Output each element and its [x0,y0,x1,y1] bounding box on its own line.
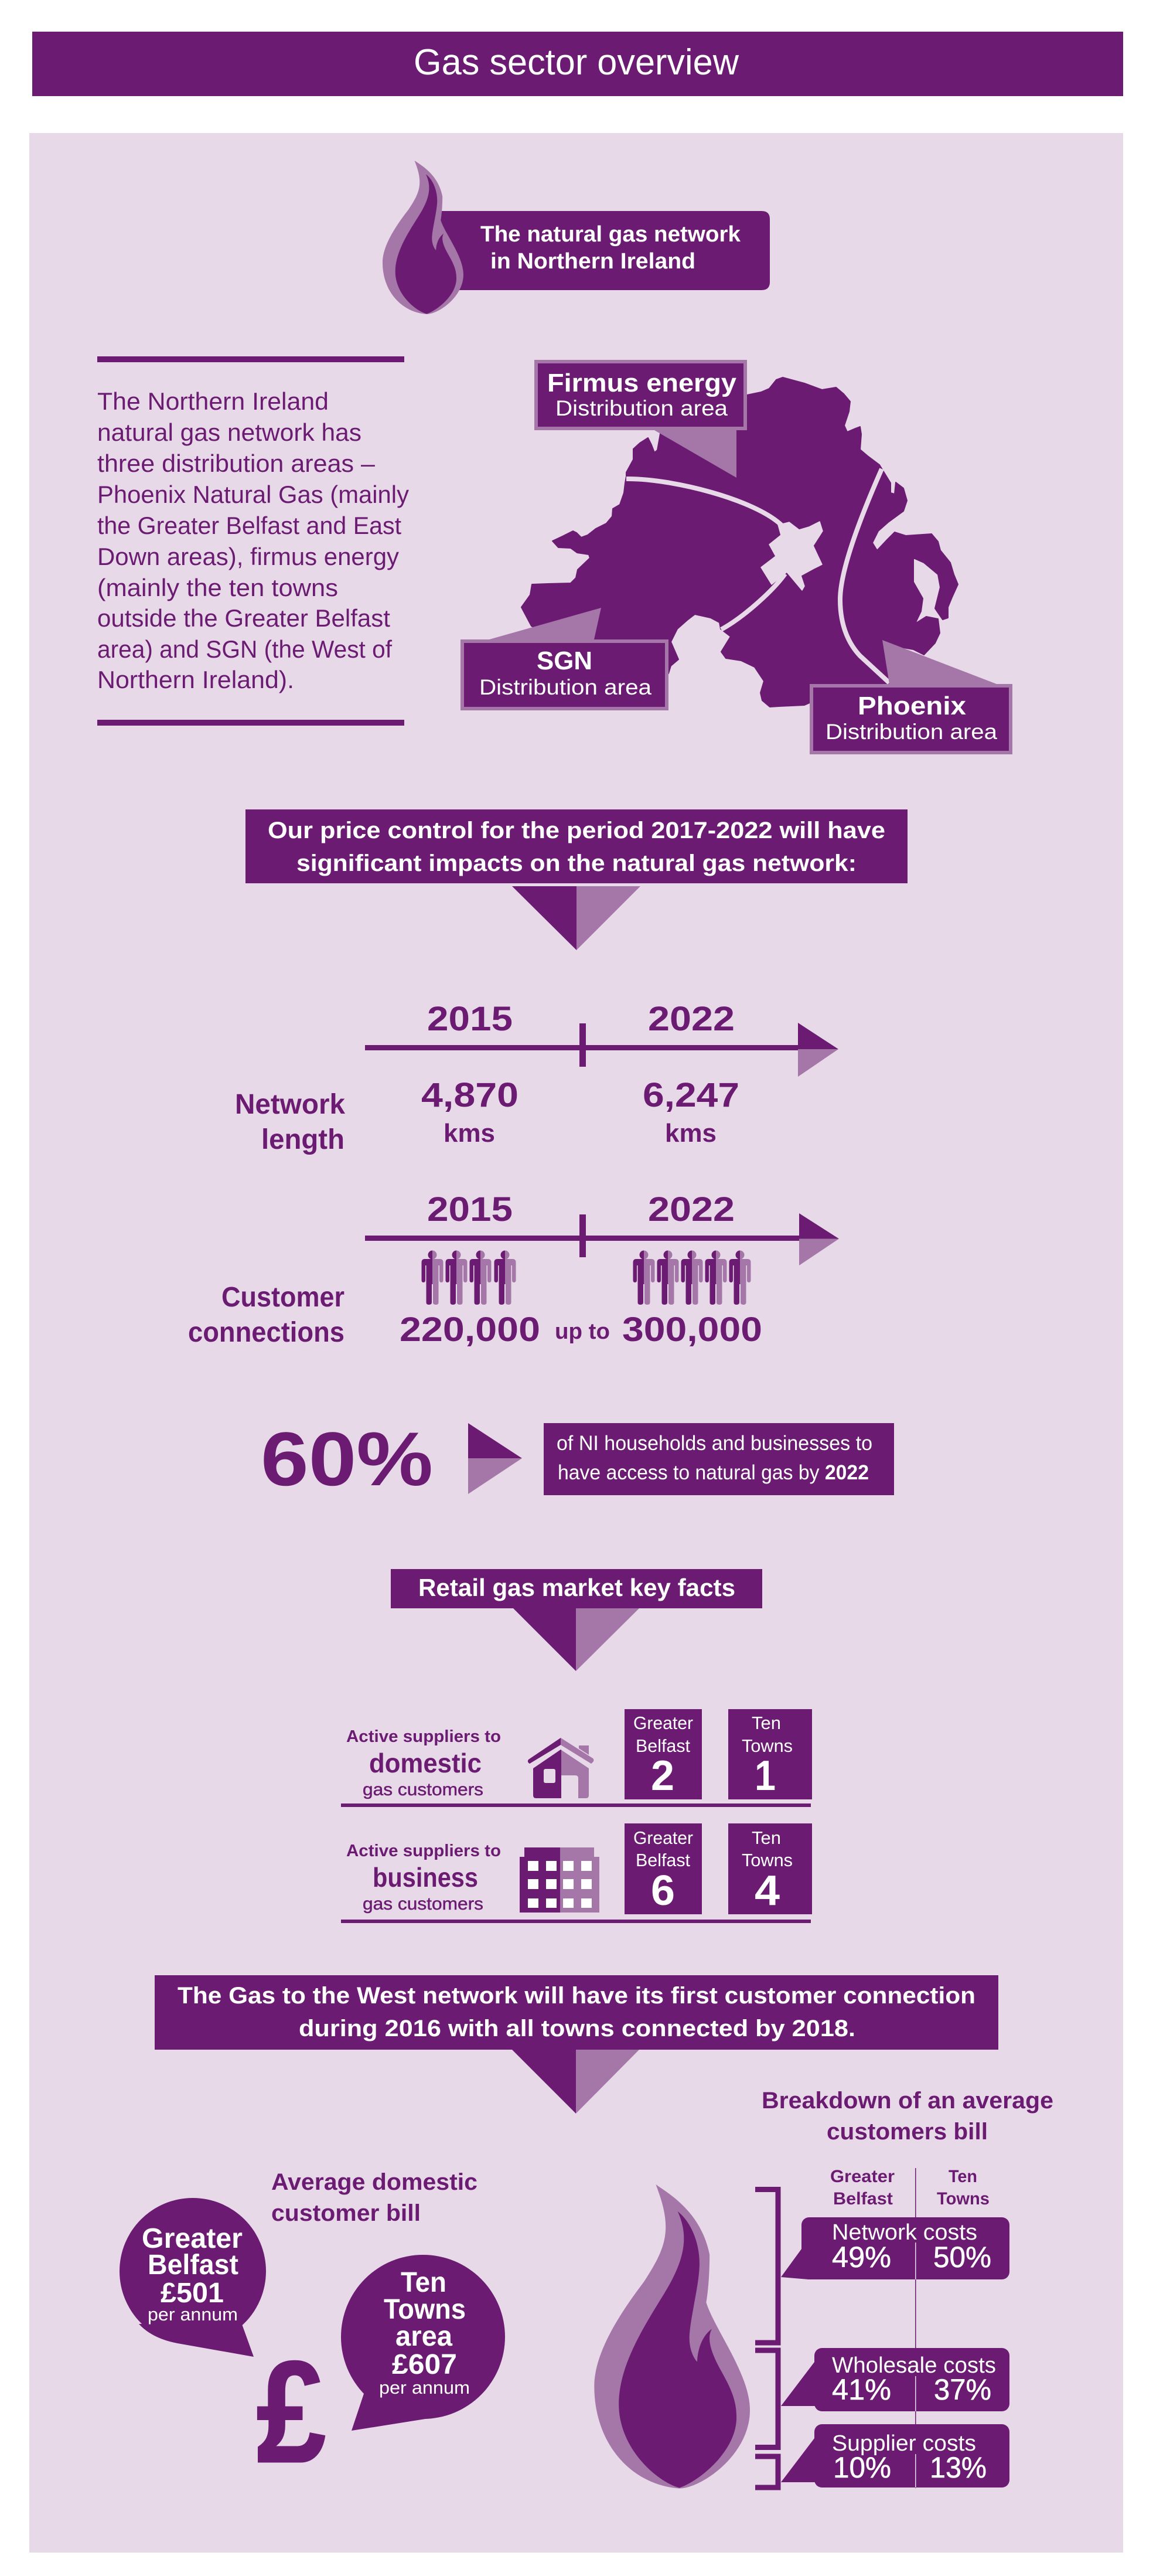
column headers: Greater [830,2167,895,2186]
speech bubble: Ten Towns: Ten [401,2267,446,2298]
icon: pound sign: £ [257,2332,326,2493]
row: business suppliers label [346,1842,501,1914]
speech bubble: Greater Belfast: Belfast [148,2250,238,2281]
callout: Phoenix: Phoenix [858,692,967,720]
icon: house [528,1738,593,1798]
icon: office building [520,1847,599,1913]
map of Northern Ireland [521,377,958,707]
stat: business Ten Towns: Towns [742,1850,793,1870]
speech bubble: Ten Towns [341,2255,505,2431]
heading: natural gas network: in Northern Ireland [490,249,695,274]
callout: SGN: Distribution area [479,675,651,699]
callout: SGN: SGN [537,646,592,675]
heading: natural gas network [436,211,770,290]
timeline: network length: kms [665,1119,717,1148]
brackets [755,2190,778,2487]
timeline: network length [235,1000,838,1155]
stat: domestic Greater Belfast [625,1709,702,1799]
column headers: Ten [949,2167,977,2186]
timeline: customer connections: 2015 [427,1190,513,1229]
cost box: supplier: Supplier costs [832,2431,976,2456]
title bar [32,32,1123,96]
row: business suppliers label: Active suppliers to [346,1842,501,1860]
timeline: customer connections [188,1190,839,1349]
stat: 60 percent: 60% [261,1416,433,1502]
stat: domestic Ten Towns: Towns [742,1736,793,1756]
stat: business Ten Towns: Ten [752,1828,781,1848]
timeline: network length: Network [235,1089,345,1120]
text block: network description: outside the Greater Belfast [97,604,390,632]
stat: business Greater Belfast [625,1823,702,1914]
timeline: network length: length [261,1124,344,1155]
callout: household access: have access to natural gas by 2022 [558,1461,869,1484]
stat: domestic Greater Belfast: Belfast [636,1736,690,1756]
timeline: customer connections: up to [555,1319,610,1344]
timeline: customer connections: Customer [221,1282,344,1313]
cost box: wholesale: 41% [832,2373,891,2406]
arrow: price control [512,886,640,950]
stat: business Greater Belfast: Greater [633,1828,693,1848]
cost box: wholesale: 37% [934,2373,991,2406]
arrow: Gas to the West [512,2050,639,2114]
callout: Firmus energy [536,362,745,478]
timeline: network length: 6,247 [643,1076,739,1114]
speech bubble: Greater Belfast: Greater [142,2223,243,2254]
heading: average domestic bill: Average domestic [271,2169,477,2195]
banner: retail key facts: Retail gas market key facts [418,1574,735,1601]
timeline: network length: 4,870 [421,1076,518,1114]
timeline: network length: 2022 [648,1000,735,1038]
timeline: customer connections: 2022 [648,1190,735,1229]
row: domestic suppliers label: Active suppliers to [346,1727,501,1746]
timeline: customer connections: connections [188,1317,344,1348]
heading: bill breakdown: customers bill [827,2119,988,2145]
speech bubble: Greater Belfast: per annum [148,2304,238,2325]
banner: Gas to the West: during 2016 with all towns connected by 2018. [299,2016,855,2041]
cost box: supplier: 10% [833,2451,891,2484]
text block: network description: three distribution areas – [97,450,376,477]
cost box: wholesale: Wholesale costs [832,2353,996,2378]
text block: network description: the Greater Belfast and East [97,512,401,539]
row: domestic suppliers label [346,1727,501,1799]
heading: bill breakdown: Breakdown of an average [762,2088,1053,2114]
icon: small flame [383,161,463,314]
text block: network description: Phoenix Natural Gas (mainly [97,481,409,508]
text block: network description: area) and SGN (the West of [97,635,392,663]
banner: Gas to the West: The Gas to the West network will have its first customer connection [178,1983,975,2009]
cost box: network: Network costs [832,2220,977,2245]
heading: bill breakdown [762,2088,1053,2145]
callout: SGN [462,608,667,709]
column headers [830,2167,990,2488]
speech bubble: Greater Belfast [120,2198,266,2357]
arrow: retail key facts [513,1608,639,1671]
stat: business Ten Towns [728,1823,812,1914]
cost box: network: 50% [933,2241,991,2274]
heading: average domestic bill [271,2169,477,2226]
text block: network description: Northern Ireland). [97,666,294,693]
callout: Phoenix [811,640,1011,753]
stat: domestic Ten Towns: 1 [755,1753,776,1799]
speech bubble: Greater Belfast: £501 [161,2278,224,2309]
text block: network description: (mainly the ten towns [97,574,338,601]
icon: people 2022 [633,1251,751,1305]
stat: domestic Greater Belfast: 2 [651,1753,674,1799]
speech bubble: Ten Towns: area [395,2321,452,2352]
banner: price control: Our price control for the period 2017-2022 will have [268,818,885,843]
speech bubble: Ten Towns: £607 [392,2349,457,2380]
text block: network description: The Northern Ireland [97,387,329,415]
timeline: customer connections: 220,000 [400,1311,540,1349]
timeline: customer connections: 300,000 [622,1311,762,1349]
callout: household access [544,1423,894,1495]
row: business suppliers label: business [373,1862,478,1893]
banner: retail key facts [391,1569,762,1608]
speech bubble: Ten Towns: per annum [379,2377,470,2398]
arrow: 60 percent [468,1423,522,1494]
text block: network description: Down areas), firmus energy [97,543,399,570]
banner: Gas to the West [155,1975,998,2050]
row: domestic suppliers label: gas customers [363,1780,483,1799]
cost box: wholesale [781,2348,1009,2411]
stat: business Greater Belfast: 6 [651,1867,675,1914]
column headers: Belfast [833,2189,893,2209]
column headers: Towns [937,2189,990,2209]
icon: large flame [594,2184,750,2489]
callout: Firmus energy: Firmus energy [547,369,737,397]
callout: Firmus energy: Distribution area [555,396,728,420]
heading: average domestic bill: customer bill [271,2200,421,2226]
stat: domestic Ten Towns: Ten [752,1713,781,1733]
callout: household access: of NI households and businesses to [557,1432,872,1455]
timeline: network length: 2015 [427,1000,513,1038]
cost box: supplier: 13% [930,2451,987,2484]
text block: network description [97,356,409,726]
speech bubble: Ten Towns: Towns [384,2294,466,2325]
stat: domestic Greater Belfast: Greater [633,1713,693,1733]
cost box: network: 49% [832,2241,891,2274]
row: business suppliers label: gas customers [363,1894,483,1914]
stat: business Ten Towns: 4 [755,1867,780,1914]
timeline: network length: kms [444,1119,495,1148]
cost box: supplier [781,2424,1009,2487]
text block: network description: natural gas network has [97,418,361,446]
stat: domestic Ten Towns [728,1709,812,1799]
callout: Phoenix: Distribution area [825,720,997,744]
title bar: Gas sector overview [414,42,739,83]
cost box: network [781,2217,1009,2279]
icon: people 2015 [422,1251,516,1305]
stat: business Greater Belfast: Belfast [636,1850,690,1870]
heading: natural gas network: The natural gas network [480,222,741,247]
row: domestic suppliers label: domestic [369,1748,482,1778]
banner: price control [245,809,908,883]
banner: price control: significant impacts on the natural gas network: [296,850,857,876]
